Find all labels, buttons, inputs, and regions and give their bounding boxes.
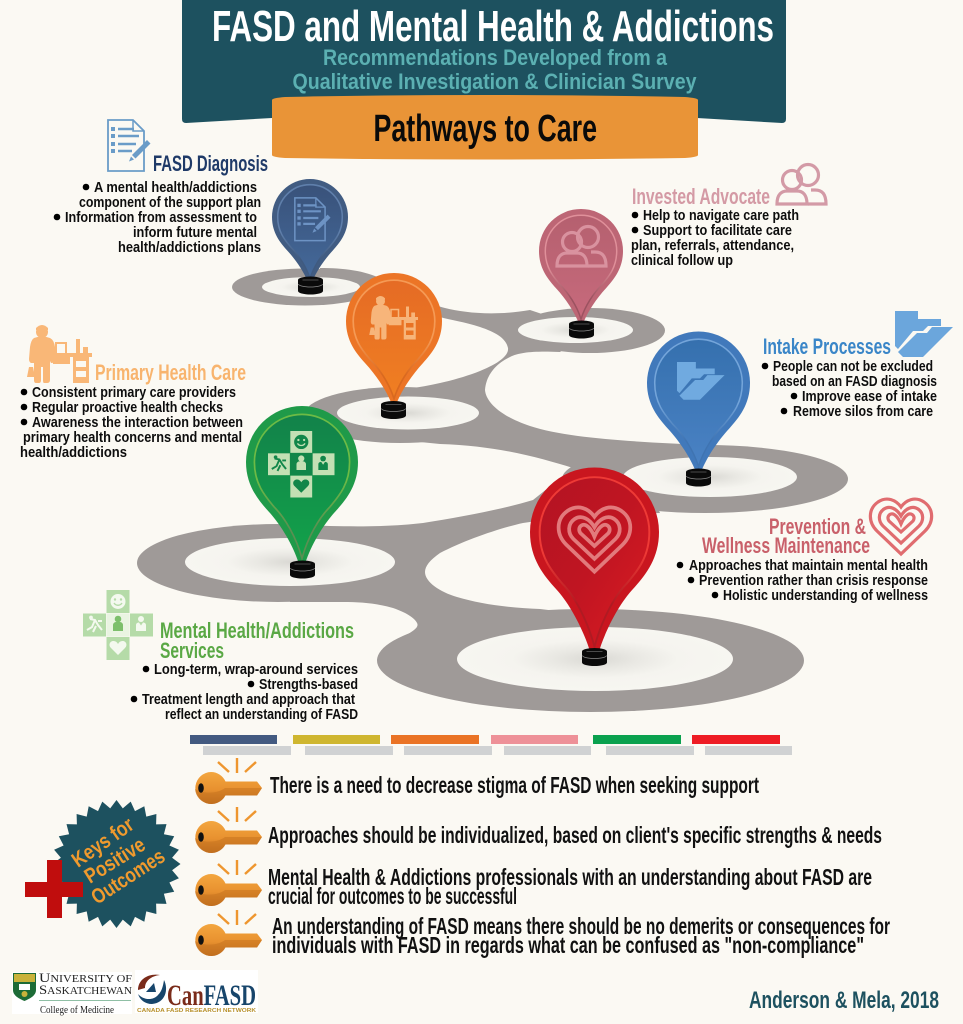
text block: intake bullets: People can not be excluded [773, 359, 933, 375]
logo: University of Saskatchewan [12, 970, 133, 1016]
panel: FASD Diagnosis [54, 120, 268, 256]
key point 3: crucial for outcomes to be successful [268, 883, 517, 909]
text block: primary care bullets: Regular proactive health checks [32, 400, 223, 416]
text block: diagnosis bullets: A mental health/addictions [94, 180, 257, 196]
heading: Prevention and Wellness Maintenance: Wellness Maintenance [702, 533, 870, 558]
logo: University of Saskatchewan: SASKATCHEWAN [39, 982, 132, 997]
panel: Mental Health/Addictions Services [83, 590, 358, 723]
icon: concentric heart [870, 499, 932, 554]
panel: Invested Advocate [631, 164, 826, 269]
text block: primary care bullets: Awareness the interaction between [32, 415, 243, 431]
colour bars divider [190, 735, 792, 755]
text block: services bullets [131, 662, 358, 723]
text block: diagnosis bullets: health/addictions plans [118, 240, 261, 256]
text block: diagnosis bullets: component of the support plan [79, 195, 261, 211]
subtitle [292, 45, 697, 94]
key point 1 [195, 758, 759, 804]
badge text [68, 813, 169, 909]
key point 4 [195, 910, 890, 958]
text block: primary care bullets: Consistent primary care providers [32, 385, 236, 401]
text block: prevention bullets: Approaches that maintain mental health [689, 558, 928, 574]
text block: advocate bullets: Support to facilitate care [643, 223, 792, 239]
key point 3 [195, 860, 872, 909]
text block: services bullets: Long-term, wrap-around services [154, 662, 358, 678]
heading: Primary Health Care: Primary Health Care [95, 360, 246, 385]
subtitle: Recommendations Developed from a [323, 45, 668, 70]
key point 2 [195, 807, 882, 853]
icon: clinician at desk [27, 325, 92, 383]
icon: document [108, 120, 150, 171]
heading: Mental Health/Addictions Services: Mental Health/Addictions [160, 618, 354, 643]
panel: Prevention and Wellness Maintenance [677, 499, 932, 604]
icon: two people [777, 164, 826, 204]
icon: folder [895, 311, 953, 357]
text block: intake bullets: Remove silos from care [793, 404, 933, 420]
logo: CanFASD: CANADA FASD RESEARCH NETWORK [137, 1008, 256, 1014]
badge text: Positive [80, 833, 149, 888]
panel: Primary Health Care [20, 325, 246, 461]
pin: FASD diagnosis [272, 179, 348, 294]
heading: Invested Advocate: Invested Advocate [632, 184, 770, 209]
text block: services bullets: reflect an understanding of FASD [165, 707, 358, 723]
text block: intake bullets: Improve ease of intake [802, 389, 937, 405]
text block: primary care bullets [20, 385, 243, 461]
pin: mental health services [246, 406, 358, 578]
text block: prevention bullets: Prevention rather than crisis response [699, 573, 928, 589]
text block: intake bullets [762, 359, 937, 420]
heading: Prevention and Wellness Maintenance [702, 514, 870, 558]
heading: FASD Diagnosis: FASD Diagnosis [153, 151, 268, 176]
panel: Intake Processes [762, 311, 953, 420]
text block: advocate bullets: Help to navigate care path [643, 208, 799, 224]
winding road path [137, 268, 848, 712]
pin: prevention and wellness [530, 468, 659, 666]
text block: services bullets: Treatment length and approach that [142, 692, 355, 708]
subtitle: Qualitative Investigation & Clinician Survey [292, 69, 697, 94]
text block: diagnosis bullets: inform future mental [133, 225, 257, 241]
pin: intake processes [647, 332, 750, 486]
text block: prevention bullets: Holistic understanding of wellness [723, 588, 928, 604]
logo: CanFASD: CanFASD [167, 979, 256, 1012]
badge text: Outcomes [87, 845, 169, 909]
text block: advocate bullets [631, 208, 799, 269]
text block: advocate bullets: clinical follow up [631, 253, 733, 269]
heading: Mental Health/Addictions Services: Services [160, 638, 224, 663]
text block: diagnosis bullets [54, 180, 261, 256]
badge text: Keys for [68, 813, 138, 872]
text block: prevention bullets [677, 558, 928, 604]
heading: Mental Health/Addictions Services [160, 618, 354, 663]
pin: primary health care [346, 273, 442, 419]
logo: University of Saskatchewan: UNIVERSITY OF [39, 970, 133, 985]
header banner [182, 0, 786, 160]
text block: advocate bullets: plan, referrals, attendance, [631, 238, 794, 254]
text block: diagnosis bullets: Information from assessment to [65, 210, 257, 226]
text block: primary care bullets: health/addictions [20, 445, 127, 461]
stop clearings on road [185, 277, 797, 691]
orange ribbon: pathways to care [272, 95, 698, 160]
heading: Prevention and Wellness Maintenance: Prevention & [769, 514, 866, 539]
pin: invested advocate [539, 209, 623, 338]
icon: red cross [25, 860, 83, 918]
heading: Intake Processes: Intake Processes [763, 334, 891, 359]
text block: primary care bullets: primary health concerns and mental [23, 430, 242, 446]
text block: services bullets: Strengths-based [259, 677, 358, 693]
orange ribbon: pathways to care: Pathways to Care [374, 108, 597, 150]
badge: Keys for Positive Outcomes [25, 800, 180, 928]
logo: CanFASD [135, 970, 258, 1014]
logo: University of Saskatchewan: College of Medicine [40, 1005, 115, 1016]
icon: health cross [83, 590, 153, 660]
